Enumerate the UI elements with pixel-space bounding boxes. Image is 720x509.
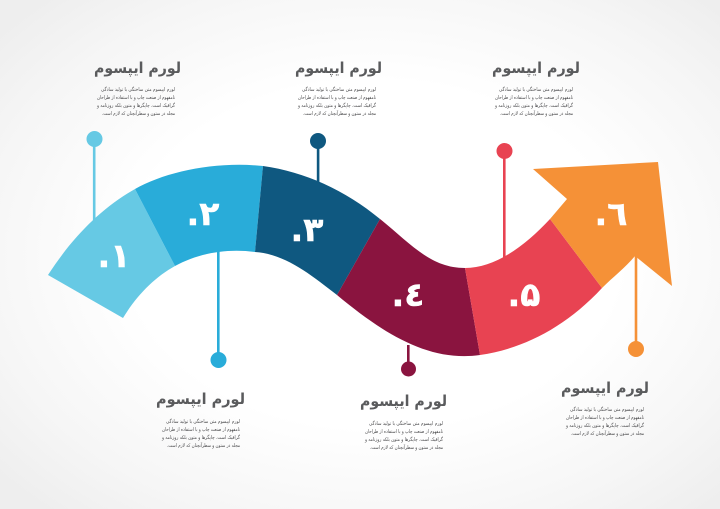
body 1: لورم ایپسوم متن ساختگی با تولید سادگی [101, 86, 175, 93]
heading 2: لورم ایپسوم [156, 390, 245, 409]
body 5: مجله در ستون و سطرآنچنان که لازم است. [500, 110, 573, 117]
heading 3: لورم ایپسوم [295, 59, 382, 78]
segment 3 [255, 166, 380, 295]
pin 4: maroon [401, 345, 416, 376]
segment 4 [337, 219, 480, 356]
pin 3: navy [310, 133, 326, 183]
body 3: نامفهوم از صنعت چاپ و با استفاده از طراحان [298, 95, 376, 101]
segment 6: arrow head [533, 162, 672, 288]
heading 6: لورم ایپسوم [561, 379, 649, 398]
number 2: ۲. [187, 194, 219, 233]
text block 6 [561, 379, 649, 437]
body 3: مجله در ستون و سطرآنچنان که لازم است. [303, 110, 376, 117]
number 4: ٤. [392, 275, 424, 314]
body 3: گرافیک است. چاپگرها و متون بلکه روزنامه و [297, 102, 377, 109]
body 5: نامفهوم از صنعت چاپ و با استفاده از طراحان [495, 95, 573, 101]
pin 2: blue [210, 250, 226, 368]
body 6: لورم ایپسوم متن ساختگی با تولید سادگی [570, 406, 644, 413]
text block 2 [156, 390, 245, 449]
segment 1 [48, 189, 175, 318]
body 4: نامفهوم از صنعت چاپ و با استفاده از طراحان [365, 429, 443, 435]
body 1: نامفهوم از صنعت چاپ و با استفاده از طراحان [97, 95, 175, 101]
segment 5 [465, 219, 602, 355]
text block 1 [94, 59, 181, 117]
body 5: لورم ایپسوم متن ساختگی با تولید سادگی [499, 86, 573, 93]
body 3 [297, 86, 377, 117]
text block 3 [295, 59, 382, 117]
segment 2 [135, 165, 263, 266]
body 3: لورم ایپسوم متن ساختگی با تولید سادگی [302, 86, 376, 93]
number 6: ٦. [595, 194, 627, 233]
body 6: گرافیک است. چاپگرها و متون بلکه روزنامه و [565, 422, 645, 429]
body 1: مجله در ستون و سطرآنچنان که لازم است. [102, 110, 175, 117]
body 2: نامفهوم از صنعت چاپ و با استفاده از طراحان [162, 427, 240, 433]
text block 4 [360, 392, 447, 451]
number 1: ۱. [98, 236, 130, 275]
heading 4: لورم ایپسوم [360, 392, 447, 411]
body 4 [364, 420, 444, 451]
heading 5: لورم ایپسوم [492, 59, 580, 78]
body 4: لورم ایپسوم متن ساختگی با تولید سادگی [369, 420, 443, 427]
pin 5: red [496, 143, 512, 259]
body 6 [565, 406, 645, 437]
body 4: مجله در ستون و سطرآنچنان که لازم است. [370, 444, 443, 451]
body 1: گرافیک است. چاپگرها و متون بلکه روزنامه و [96, 102, 176, 109]
body 2: لورم ایپسوم متن ساختگی با تولید سادگی [166, 418, 240, 425]
pin 1: light blue [86, 131, 102, 221]
heading 1: لورم ایپسوم [94, 59, 181, 78]
body 5: گرافیک است. چاپگرها و متون بلکه روزنامه و [494, 102, 574, 109]
body 6: نامفهوم از صنعت چاپ و با استفاده از طراحان [566, 415, 644, 421]
number 5: ۵. [508, 275, 540, 314]
pin 6: orange [628, 255, 644, 357]
body 2: مجله در ستون و سطرآنچنان که لازم است. [167, 442, 240, 449]
number 3: ۳. [291, 210, 323, 249]
body 4: گرافیک است. چاپگرها و متون بلکه روزنامه و [364, 436, 444, 443]
body 1 [96, 86, 176, 117]
text block 5 [492, 59, 580, 117]
body 6: مجله در ستون و سطرآنچنان که لازم است. [571, 430, 644, 437]
body 2 [161, 418, 241, 449]
body 2: گرافیک است. چاپگرها و متون بلکه روزنامه و [161, 434, 241, 441]
body 5 [494, 86, 574, 117]
